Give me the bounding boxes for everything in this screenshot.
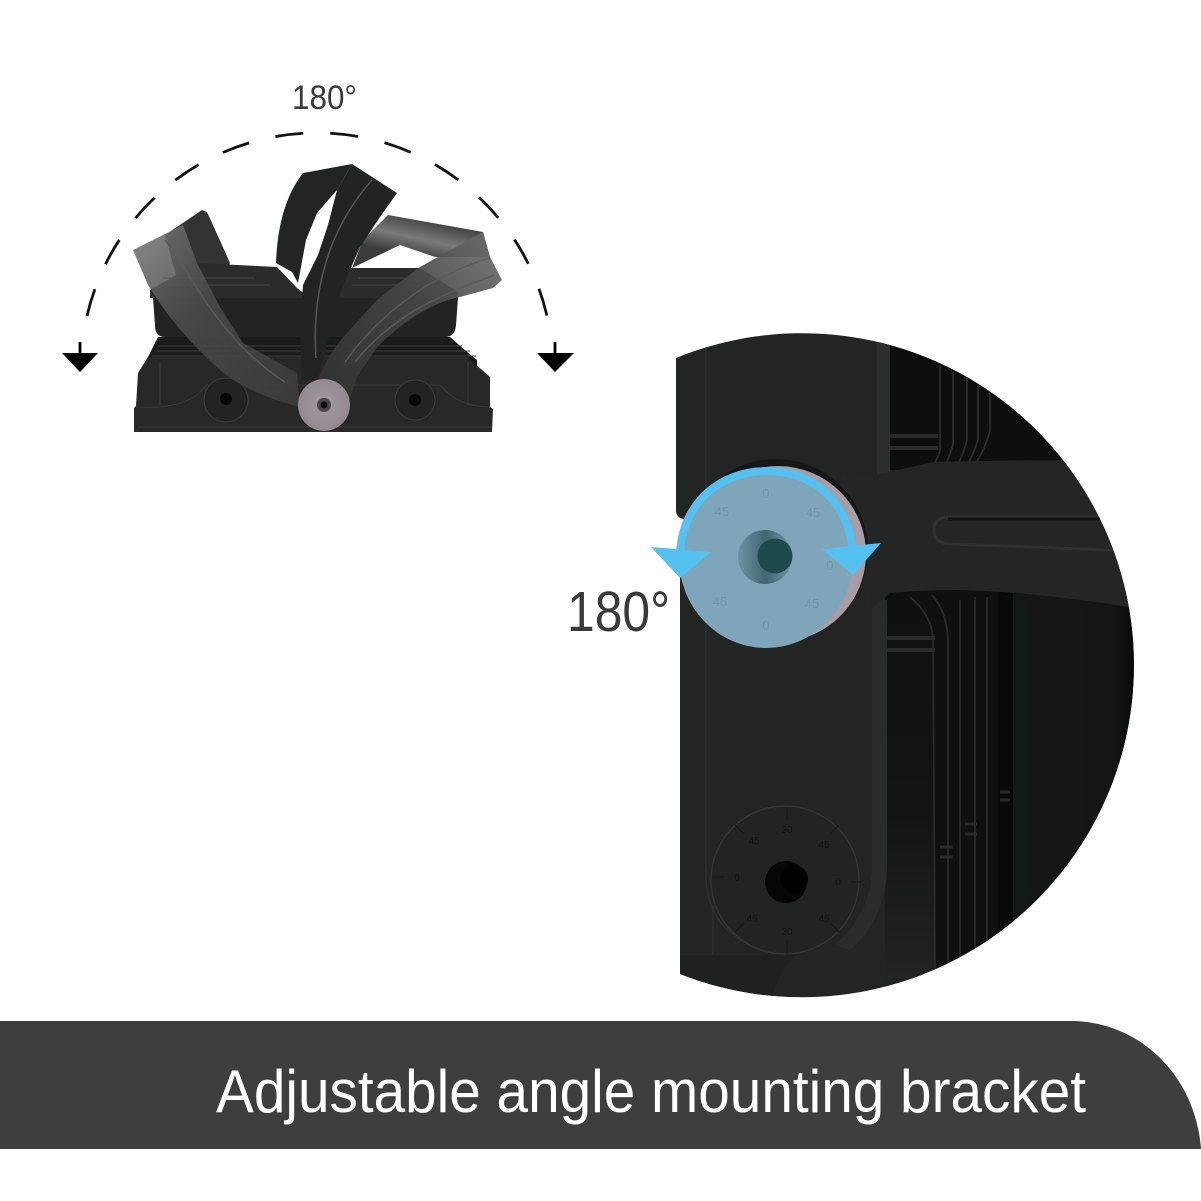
fixture base (134, 357, 493, 432)
arm slot (934, 517, 1135, 551)
dial markings: 0 (826, 558, 834, 573)
bracket top bar right (352, 215, 490, 268)
dial markings: 0 (762, 486, 770, 501)
bottom banner (0, 1021, 1201, 1149)
dial hole core (758, 538, 792, 574)
lower dial: 30 (781, 825, 793, 836)
vertical rib upper (877, 342, 890, 474)
close-up circular view of bracket (670, 330, 1140, 1000)
lower fin clips (940, 792, 1010, 857)
lower clip (887, 638, 935, 650)
dial markings (713, 486, 834, 633)
dial hole (738, 530, 792, 584)
upper clip (890, 436, 938, 448)
dark heat sink upper (885, 344, 1070, 470)
lower right panel (1013, 590, 1134, 922)
lower fins (910, 595, 987, 970)
bracket front arm (300, 164, 397, 380)
banner title: Adjustable angle mounting bracket (216, 1058, 1086, 1125)
upper fins (934, 365, 990, 464)
small fixture rotating through bracket positions (133, 164, 502, 432)
bracket arm left (133, 225, 300, 407)
dial markings: 45 (806, 505, 820, 520)
blue dial with hole (679, 468, 853, 648)
pivot knob (298, 379, 350, 431)
arm groove lines (165, 180, 495, 382)
dial markings: 0 (762, 618, 770, 633)
arrow: left down (62, 342, 98, 372)
bracket right band (885, 600, 887, 886)
heat sink lower fins (935, 590, 1000, 1000)
recess ring around pivot (718, 459, 868, 638)
lower dial (711, 806, 862, 954)
base lower curve (680, 955, 773, 996)
lower dial: 0 (835, 877, 841, 888)
label: 180 degree top: 180° (292, 79, 357, 117)
heat sink lower left bay (885, 590, 935, 1000)
small dial left (204, 378, 248, 422)
lower dial: 30 (781, 927, 793, 938)
dial markings: 45 (715, 504, 729, 519)
blue rotation arrow (651, 471, 881, 578)
fixture upper plates (150, 263, 458, 298)
bracket outline left (705, 347, 738, 986)
lower dial: 45 (746, 914, 758, 925)
base rim line (136, 362, 492, 427)
bracket back arm (276, 164, 352, 283)
heat sink dark strip (998, 592, 1014, 933)
fixture cooling fins (148, 337, 477, 372)
lower dial: 45 (748, 836, 760, 847)
lower dial: 45 (818, 914, 830, 925)
bracket arm right (318, 232, 502, 405)
dashed rotation arc (87, 133, 547, 316)
plate ribs (160, 278, 440, 285)
small dial right (395, 380, 435, 420)
lower dial: 0 (734, 873, 740, 884)
left head rear (165, 210, 230, 300)
lower dial: 45 (818, 840, 830, 851)
pink disc behind (763, 466, 866, 637)
arm to the right (877, 460, 1129, 607)
fixture housing (153, 298, 458, 337)
dial markings: 45 (713, 594, 727, 609)
dial markings: 45 (805, 596, 819, 611)
label: 180 degree large: 180° (567, 580, 670, 644)
arrow: right down (537, 342, 574, 372)
